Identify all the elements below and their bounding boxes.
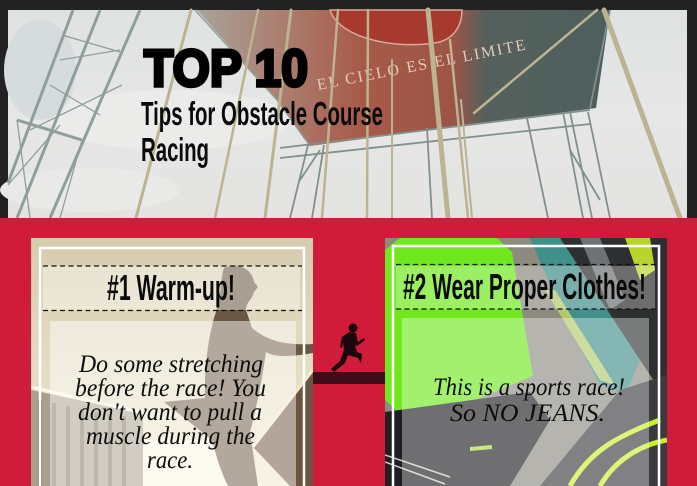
body text: proper clothes: So NO JEANS. [450,400,605,427]
dashed rules [396,264,656,309]
body text panel [402,318,649,486]
body text: warm-up: race. [147,447,193,474]
icon: running figure [331,324,365,372]
subtitle [141,95,383,168]
left steel tower [8,10,310,218]
panel 1: warm-up [31,238,313,486]
connector bar [313,372,385,384]
body text panel [50,321,296,486]
heading: warm-up: #1 Warm-up! [107,267,235,308]
photo: shirt, pants and shoes [385,238,667,486]
body text: warm-up: muscle during the [86,423,255,450]
photo: woman stretching [31,238,313,486]
panel 2: proper clothes [385,238,667,486]
body text: warm-up: don't want to pull a [78,399,262,426]
body text: proper clothes: This is a sports race! [433,374,625,401]
header photo: rope obstacle under banner [0,10,687,218]
body text: warm-up: Do some stretching [78,351,263,378]
banner emblem [330,10,462,45]
banner slogan: EL CIELO ES EL LIMITE [316,37,527,94]
body text: warm-up [75,351,266,474]
subtitle: Tips for Obstacle Course [141,95,383,132]
white frame [393,246,659,486]
subtitle: Racing [141,131,209,168]
body text: proper clothes [433,374,625,427]
white frame [40,248,304,486]
dashed rules [43,266,302,310]
header band [396,266,655,309]
central truss [280,10,610,218]
red lower section [0,218,697,486]
body text: warm-up: before the race! You [75,375,266,402]
title: TOP 10: TOP 10 [144,40,308,98]
ropes [136,10,680,218]
header band [43,266,300,310]
banner [197,10,610,146]
